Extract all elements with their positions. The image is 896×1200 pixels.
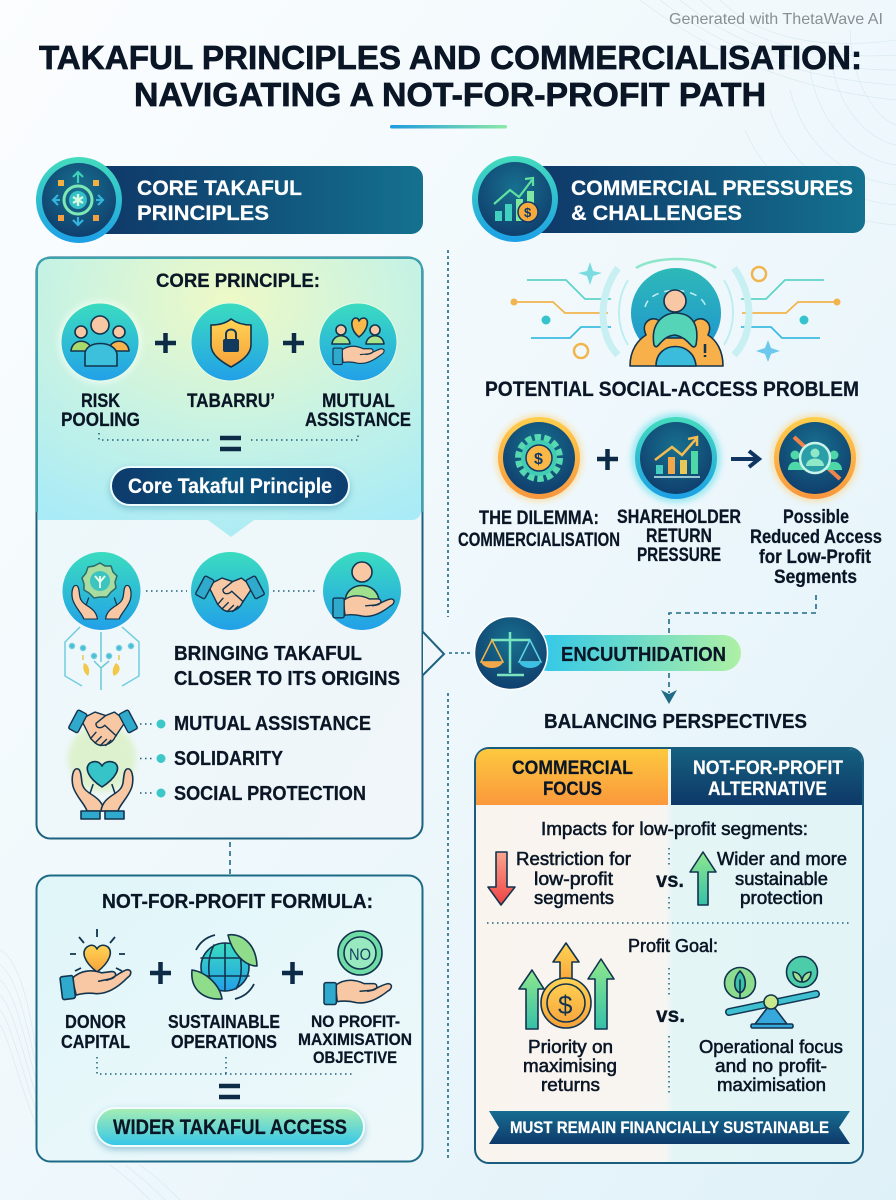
label: the dilemma commercialisation [458,508,620,551]
text: wider protection [717,849,847,908]
icon: person in hand [323,552,401,630]
text: operational focus: maximisation [717,1075,826,1095]
label: tabarru: TABARRU’ [187,391,275,412]
header: commercial focus: FOCUS [543,779,602,800]
icon: donor capital [60,929,133,1000]
label: shareholder return pressure: RETURN [646,526,712,547]
icon: growth chart with coin [494,178,538,222]
icon: no profit hand [324,931,391,1004]
header: not-for-profit alternative: NOT-FOR-PROFIT [693,758,843,779]
heading: potential social access problem: POTENTIAL SOCIAL-ACCESS PROBLEM [485,378,859,401]
heading: bringing takaful closer [174,643,400,690]
heading: core principle: CORE PRINCIPLE: [156,271,320,292]
text: restriction: low-profit [534,869,613,889]
text: operational focus [699,1037,843,1095]
label: sustainable operations: OPERATIONS [171,1032,277,1052]
text: operational focus: Operational focus [699,1037,843,1057]
heading: core takaful principles: PRINCIPLES [137,202,269,225]
icon: scales [474,616,548,690]
heading: bringing takaful closer: CLOSER TO ITS ORIGINS [174,668,400,690]
text: wider protection: Wider and more [717,849,847,869]
heading: formula: NOT-FOR-PROFIT FORMULA: [102,891,373,913]
heading: core takaful principles [36,157,423,243]
heading: balancing perspectives: BALANCING PERSPECTIVES [544,710,807,733]
section divider: central dashed line [448,250,470,1160]
arrow: panel pointer [423,633,444,675]
pill: wider takaful access [96,1108,364,1146]
icon: mutual assistance [319,303,397,381]
label: donor capital: DONOR [65,1012,126,1032]
list: values: SOCIAL PROTECTION [174,783,366,805]
icon: coin with arrows [519,943,614,1029]
panel: comparison table [475,748,863,1163]
text: priority [523,1037,617,1095]
arrow: to balancing perspectives [661,595,816,704]
label: mutual assistance [305,391,411,431]
icon: shareholder chart [631,413,721,503]
pill: wider takaful access: WIDER TAKAFUL ACCESS [113,1116,347,1139]
text: operational focus: and no profit- [715,1056,827,1076]
arrow: leads to [731,451,759,467]
icon: no profit hand: NO [349,945,371,964]
heading: bringing takaful closer: BRINGING TAKAFUL [174,643,362,665]
arrow: down red [488,852,515,905]
heading: core takaful principles: CORE TAKAFUL [137,177,302,200]
icon: handshake and heart hands [68,710,138,819]
banner: must remain financially sustainable: MUST REMAIN FINANCIALLY SUSTAINABLE [510,1118,829,1137]
label: donor capital [61,1012,130,1052]
label: donor capital: CAPITAL [61,1032,130,1052]
label: sustainable operations: SUSTAINABLE [168,1012,280,1032]
text: priority: maximising [523,1056,617,1076]
label: risk pooling: RISK [81,391,120,412]
text: priority: Priority on [528,1037,613,1057]
icon: tabarru shield [191,303,269,381]
icon: plus [150,962,171,984]
icon: balance with leaves [724,956,818,1028]
label: shareholder return pressure: SHAREHOLDER [617,507,741,528]
title: TAKAFUL PRINCIPLES AND COMMERCIALISATION: [39,39,862,76]
label: the dilemma commercialisation: COMMERCIALISATION [458,530,620,551]
label: no profit maximisation objective: NO PROFIT- [311,1012,400,1031]
heading: commercial pressures and challenges [472,156,865,242]
text: restriction: Restriction for [516,849,631,869]
label: possible reduced access: Possible [783,507,849,528]
list: values: SOLIDARITY [174,748,284,770]
panel: not-for-profit formula [36,876,422,1162]
arrow: up green [690,852,716,905]
icon: growth chart with coin: $ [524,205,532,220]
text: priority: returns [541,1075,600,1095]
text: versus: vs. [656,869,684,892]
label: possible reduced access: for Low-Profit [759,547,872,568]
icon: plus [282,962,303,984]
label: no profit maximisation objective: MAXIMISATION [298,1030,412,1049]
icon: handshake circle [191,552,269,630]
pill: encuuthidation [530,635,741,671]
watermark: Generated with ThetaWave AI [669,11,883,28]
text: restriction: segments [534,888,614,908]
icon: plus [283,333,304,353]
subheading: profit goal: Profit Goal: [628,936,718,956]
label: possible reduced access [750,507,882,588]
icon: globe and leaves [192,935,257,999]
icon: branching tree [65,627,139,690]
icon: risk pooling [58,300,142,384]
subheading: impacts: Impacts for low-profit segments: [541,819,808,839]
header: not-for-profit alternative [671,749,862,805]
label: risk pooling: POOLING [61,410,140,431]
icon: equals [220,438,241,449]
icon: dilemma gear [495,414,583,502]
heading: commercial pressures and challenges: COMMERCIAL PRESSURES [571,177,853,200]
icon: core asterisk [53,172,103,225]
banner: must remain financially sustainable [489,1111,850,1144]
pill: encuuthidation: ENCUUTHIDATION [561,644,726,666]
label: shareholder return pressure [617,507,741,566]
icon: plus [597,449,618,470]
label: sustainable operations [168,1012,280,1052]
pill: core takaful principle: Core Takaful Principle [128,475,332,498]
label: mutual assistance: MUTUAL [322,391,395,412]
text: versus: vs. [656,1004,685,1027]
label: possible reduced access: Segments [774,567,857,588]
list: values: MUTUAL ASSISTANCE [174,713,371,735]
label: no profit maximisation objective [298,1012,412,1067]
title [39,39,862,113]
text: wider protection: protection [740,888,823,908]
icon: hands holding seal [62,552,140,630]
icon: coin with arrows: $ [558,990,573,1020]
header: not-for-profit alternative: ALTERNATIVE [708,779,827,800]
text: restriction [516,849,631,908]
icon: equals [219,1086,240,1097]
header: commercial focus [476,749,668,805]
text: wider protection: sustainable [735,869,828,889]
title: NAVIGATING A NOT-FOR-PROFIT PATH [134,76,766,113]
label: the dilemma commercialisation: THE DILEMMA: [479,508,599,529]
label: shareholder return pressure: PRESSURE [637,545,721,566]
panel: core principle [36,258,422,838]
pill: core takaful principle [111,467,349,505]
icon: plus [155,333,176,353]
heading: commercial pressures and challenges: & CHALLENGES [571,202,742,225]
icon: dilemma gear: $ [534,451,543,468]
header: commercial focus: COMMERCIAL [512,758,633,779]
connector: panel link [229,842,231,874]
illustration: social access problem [488,259,862,366]
icon: reduced access magnifier [771,414,859,502]
label: mutual assistance: ASSISTANCE [305,410,411,431]
list: values [140,713,371,805]
label: risk pooling [61,391,140,431]
title underline [390,125,507,128]
label: no profit maximisation objective: OBJECTIVE [313,1048,397,1067]
